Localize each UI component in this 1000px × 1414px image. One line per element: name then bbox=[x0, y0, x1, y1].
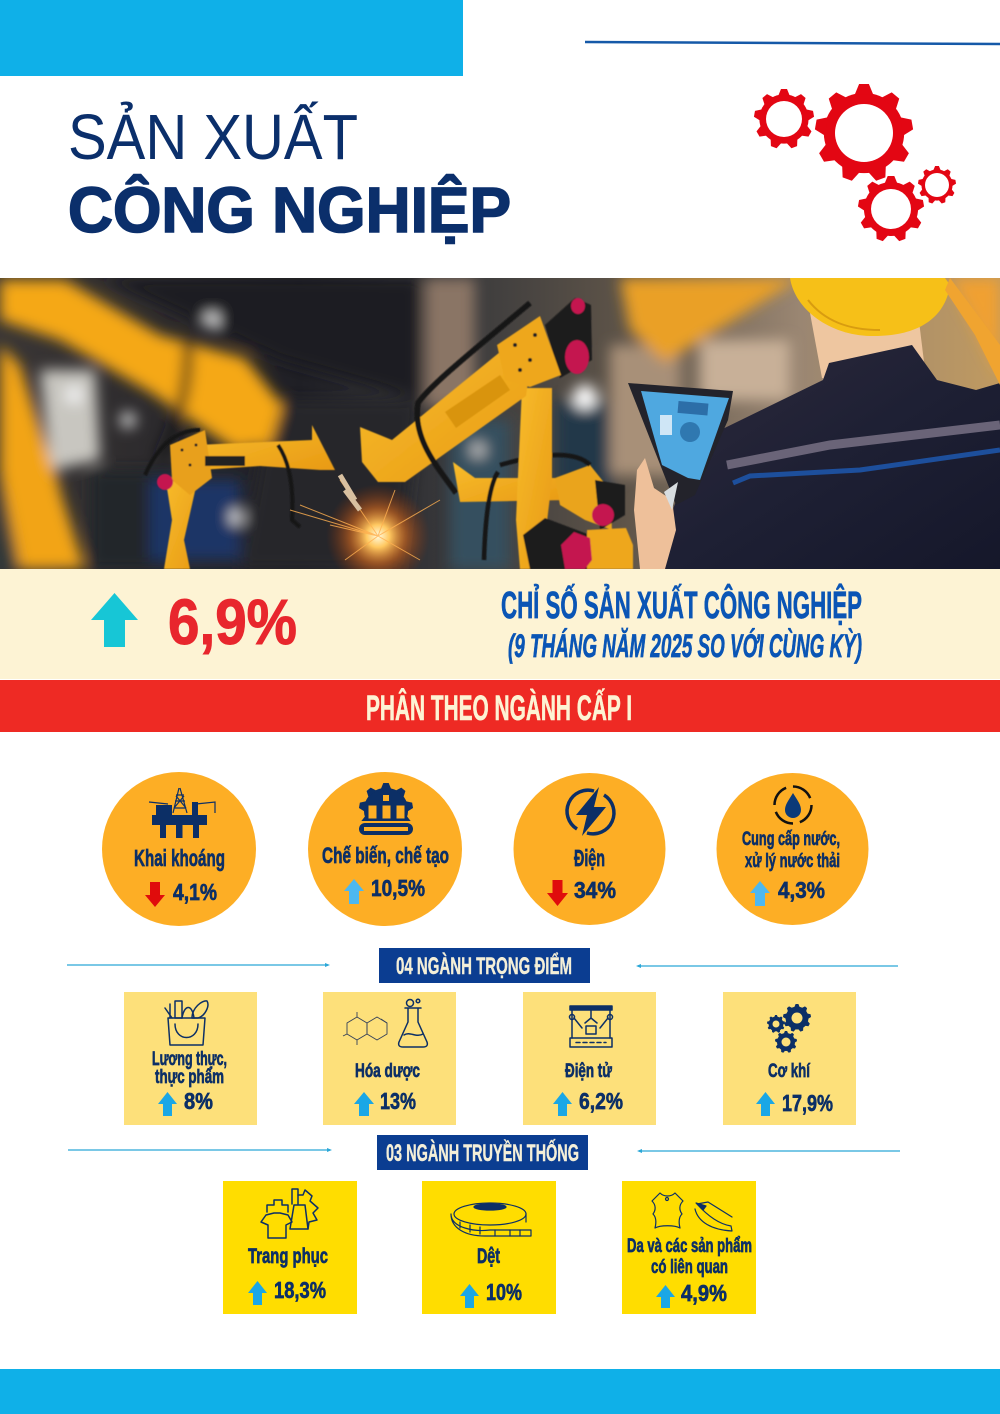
card: da và sản phẩm: có liên quan bbox=[651, 1257, 728, 1278]
stat band bbox=[0, 569, 1000, 679]
icon: red gears bbox=[753, 84, 956, 242]
circle: điện: Điện bbox=[574, 845, 605, 871]
card: hóa dược: Hóa dược bbox=[355, 1061, 420, 1082]
top blue band bbox=[0, 0, 463, 76]
circle: khai khoáng bbox=[102, 772, 256, 926]
card: da và sản phẩm: Da và các sản phẩm bbox=[627, 1236, 752, 1257]
head and motors bbox=[545, 298, 592, 378]
arrow up bbox=[750, 881, 770, 906]
card: dệt bbox=[422, 1181, 556, 1314]
circle: cung cấp nước bbox=[716, 773, 868, 925]
arrow down bbox=[547, 880, 568, 906]
title bbox=[68, 100, 511, 246]
circle: chế biến, chế tạo bbox=[308, 772, 462, 926]
card: hóa dược: 13% bbox=[380, 1088, 416, 1114]
icon: three gears bbox=[767, 1004, 811, 1053]
card: trang phục: Trang phục bbox=[248, 1245, 328, 1268]
heading: 04 ngành trọng điểm bbox=[379, 948, 590, 983]
icon: grocery bag bbox=[165, 1001, 208, 1045]
heading: 04 ngành trọng điểm: 04 NGÀNH TRỌNG ĐIỂM bbox=[396, 952, 572, 980]
main column bbox=[516, 388, 552, 569]
card: lương thực: thực phẩm bbox=[155, 1067, 224, 1088]
circle: điện bbox=[514, 773, 666, 925]
sparks bbox=[328, 486, 427, 569]
card: điện tử: 6,2% bbox=[579, 1088, 623, 1114]
card: da và sản phẩm bbox=[622, 1181, 756, 1314]
card: hóa dược bbox=[323, 992, 456, 1125]
main arm bbox=[360, 352, 530, 482]
circle: cung cấp nước: xử lý nước thải bbox=[745, 851, 840, 872]
base bbox=[523, 518, 590, 569]
arrow: right connector 04 bbox=[636, 964, 898, 968]
heading: 03 ngành truyền thống: 03 NGÀNH TRUYỀN THỐNG bbox=[386, 1139, 579, 1167]
icon: flask bbox=[399, 999, 427, 1047]
arrow up bbox=[344, 879, 364, 904]
title: SẢN XUẤT bbox=[68, 100, 358, 173]
arrow up bbox=[756, 1092, 775, 1116]
arrow up bbox=[248, 1281, 267, 1305]
arrow: left connector 04 bbox=[67, 963, 330, 967]
card: trang phục bbox=[223, 1181, 357, 1314]
card: dệt: 10% bbox=[486, 1279, 522, 1305]
icon: shoe bbox=[695, 1202, 732, 1231]
icon: assembly machine bbox=[570, 1006, 612, 1047]
icon: leather hide bbox=[652, 1193, 683, 1228]
title: CÔNG NGHIỆP bbox=[68, 173, 511, 246]
bottom blue band bbox=[0, 1369, 1000, 1414]
arrow up bbox=[656, 1285, 675, 1308]
arrow up bbox=[354, 1092, 374, 1116]
card: lương thực: Lương thực, bbox=[152, 1049, 227, 1070]
circle: chế biến, chế tạo: Chế biến, chế tạo bbox=[322, 843, 449, 868]
card: điện tử: Điện tử bbox=[565, 1061, 612, 1082]
card: dệt: Dệt bbox=[477, 1245, 500, 1268]
circle: cung cấp nước: Cung cấp nước, bbox=[742, 829, 840, 850]
stat description bbox=[501, 582, 862, 664]
right lower robot bbox=[453, 462, 570, 502]
circle: chế biến, chế tạo: 10,5% bbox=[371, 875, 425, 901]
circle: khai khoáng: Khai khoáng bbox=[134, 845, 225, 871]
icon: gear and conveyor bbox=[355, 783, 417, 837]
icon: oil rig bbox=[149, 788, 215, 838]
arrow up bbox=[460, 1284, 479, 1308]
card: cơ khí: 17,9% bbox=[782, 1090, 833, 1116]
card: điện tử bbox=[523, 992, 656, 1125]
card: trang phục: 18,3% bbox=[274, 1277, 326, 1303]
headline number: 6,9% bbox=[168, 586, 297, 658]
arrow down bbox=[145, 882, 165, 907]
card: cơ khí: Cơ khí bbox=[768, 1061, 810, 1082]
icon: molecule bbox=[343, 1012, 387, 1045]
icon: up arrow cyan bbox=[91, 593, 138, 647]
left small robot bbox=[164, 478, 198, 569]
top right line bbox=[585, 42, 1000, 44]
circle: điện: 34% bbox=[574, 877, 616, 903]
card: lương thực bbox=[124, 992, 257, 1125]
red section banner bbox=[0, 680, 1000, 732]
worker bbox=[810, 313, 924, 378]
icon: water cycle bbox=[774, 786, 812, 824]
icon: measuring tape bbox=[451, 1203, 531, 1236]
heading: 03 ngành truyền thống bbox=[377, 1135, 588, 1170]
arrow: right connector 03 bbox=[637, 1149, 900, 1153]
arrow up bbox=[158, 1092, 177, 1116]
icon: garment factory bbox=[261, 1189, 318, 1238]
red section banner: PHÂN THEO NGÀNH CẤP I bbox=[366, 688, 632, 728]
arrow: left connector 03 bbox=[68, 1148, 332, 1152]
photo: robots and worker bbox=[0, 278, 1000, 588]
circle: cung cấp nước: 4,3% bbox=[778, 877, 825, 903]
circle: khai khoáng: 4,1% bbox=[173, 879, 217, 905]
arrow up bbox=[553, 1092, 572, 1116]
card: cơ khí bbox=[723, 992, 856, 1125]
card: da và sản phẩm: 4,9% bbox=[681, 1280, 727, 1306]
card: lương thực: 8% bbox=[184, 1088, 213, 1114]
icon: lightning bbox=[567, 787, 614, 836]
